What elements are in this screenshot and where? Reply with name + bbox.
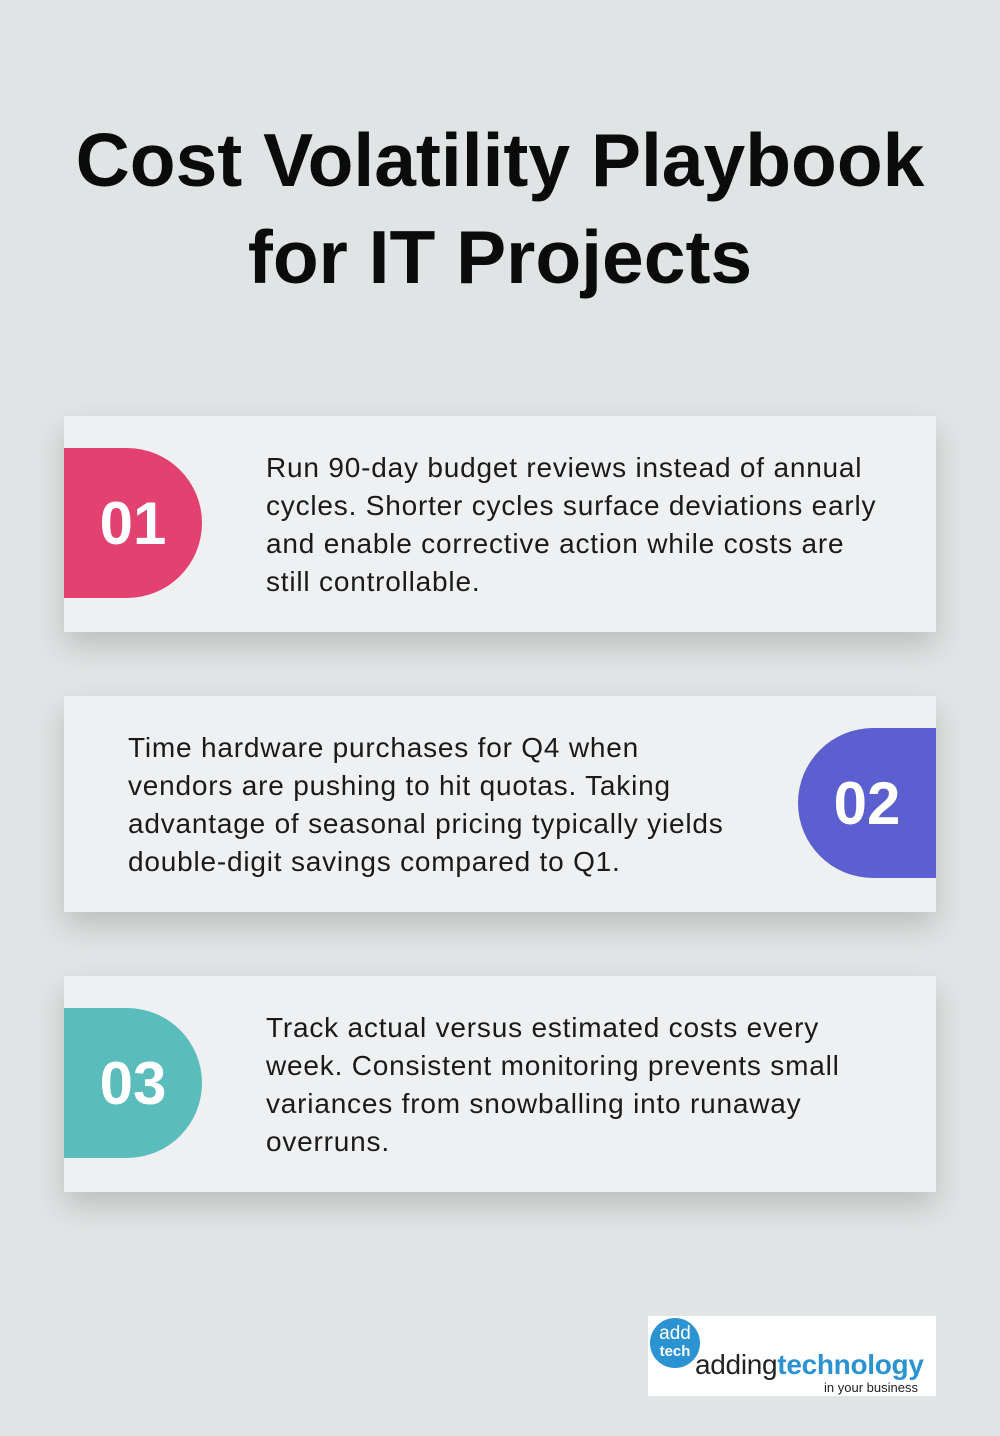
title: Cost Volatility Playbook bbox=[76, 118, 924, 202]
badge 01 bbox=[64, 448, 202, 598]
badge 03: 03 bbox=[100, 1050, 166, 1116]
logo bbox=[648, 1316, 936, 1396]
title: for IT Projects bbox=[248, 215, 752, 299]
card 3 bbox=[64, 976, 936, 1192]
text 2: double-digit savings compared to Q1. bbox=[128, 846, 621, 877]
text 1: still controllable. bbox=[266, 566, 480, 597]
text 1 bbox=[266, 452, 876, 597]
text 2 bbox=[128, 732, 724, 877]
badge 01: 01 bbox=[100, 490, 166, 556]
title bbox=[76, 118, 924, 299]
text 2: vendors are pushing to hit quotas. Taking bbox=[128, 770, 671, 801]
text 1: and enable corrective action while costs are bbox=[266, 528, 844, 559]
logo circle: tech bbox=[660, 1343, 690, 1360]
card 1 bbox=[64, 416, 936, 632]
text 3: variances from snowballing into runaway bbox=[266, 1088, 801, 1119]
tagline: in your business bbox=[824, 1380, 918, 1395]
logo wordmark: addingtechnology bbox=[695, 1349, 924, 1380]
text 2: advantage of seasonal pricing typically yields bbox=[128, 808, 724, 839]
badge 02 bbox=[798, 728, 936, 878]
text 1: cycles. Shorter cycles surface deviations early bbox=[266, 490, 876, 521]
logo circle: add bbox=[659, 1323, 691, 1344]
text 3: overruns. bbox=[266, 1126, 390, 1157]
text 1: Run 90-day budget reviews instead of annual bbox=[266, 452, 862, 483]
badge 02: 02 bbox=[834, 770, 900, 836]
text 3: Track actual versus estimated costs every bbox=[266, 1012, 819, 1043]
badge 03 bbox=[64, 1008, 202, 1158]
card 2 bbox=[64, 696, 936, 912]
text 3: week. Consistent monitoring prevents small bbox=[266, 1050, 840, 1081]
text 2: Time hardware purchases for Q4 when bbox=[128, 732, 639, 763]
logo circle bbox=[650, 1318, 700, 1368]
text 3 bbox=[266, 1012, 840, 1157]
